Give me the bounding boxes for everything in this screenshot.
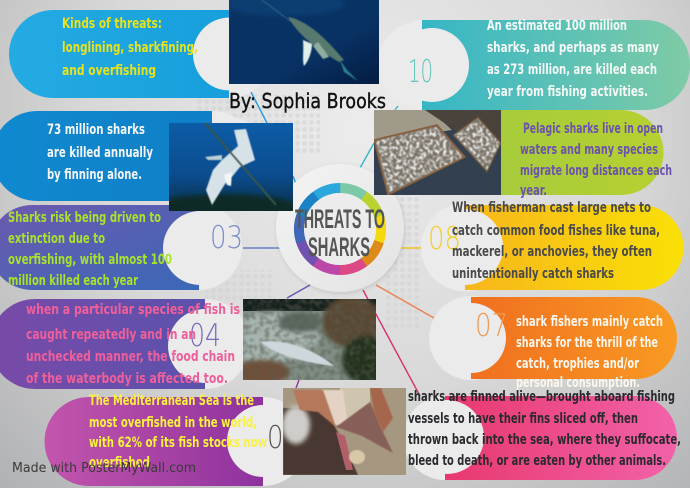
center title [295,204,385,262]
watermark: Made with PosterMyWall.com [12,461,196,476]
text: fishing activities [487,18,659,100]
text: extinction risk: million killed each year [8,273,138,289]
panel: finned alive [403,396,677,480]
text: food chain: when a particular species of fish is [26,302,240,318]
text: kinds of threats: and overfishing [62,63,156,79]
text: food chain: caught repeatedly and in an [26,327,196,343]
text: 73 million sharks: by finning alone. [47,167,142,183]
panel: kinds of threats [9,10,273,98]
photo: drying shark fins [374,110,501,195]
center title: SHARKS [308,232,370,262]
photo: shark on longline [225,0,379,84]
text: extinction risk: extinction due to [8,231,105,247]
text: 73 million sharks: 73 million sharks [47,122,145,138]
text: 73 million sharks: are killed annually [47,145,153,161]
text: Mediterranean Sea: with 62% of its fish stocks now [89,435,267,451]
text: Mediterranean Sea [89,393,267,471]
byline: By: Sophia Brooks [229,89,386,113]
number 03: 03 [210,220,243,256]
photo: dead shark on reef [243,299,376,380]
center title: THREATS TO [295,204,385,234]
panel: 73 million sharks [0,111,271,201]
text: extinction risk: Sharks risk being driven to [8,210,161,226]
number 07: 07 [475,308,508,344]
text: fishing activities: An estimated 100 million [487,18,627,34]
panel: large nets [421,204,684,292]
text: extinction risk [8,210,172,289]
text: Mediterranean Sea: The Mediterranean Sea is the [89,393,254,409]
text: shark fishers: catch, trophies and/or [516,356,639,372]
text: food chain: unchecked manner, the food chain [26,349,235,365]
text: Mediterranean Sea: most overfished in the world, [89,415,257,431]
text: Mediterranean Sea: overfished [89,455,150,471]
text: food chain: of the waterbody is affected too. [26,371,228,387]
photo: fin being cut [282,388,406,475]
text: 73 million sharks [47,122,153,183]
photo: hammerhead on line [169,123,293,211]
text: large nets: unintentionally catch sharks [452,266,614,282]
text: kinds of threats: Kinds of threats: [62,16,162,32]
text: kinds of threats: longlining, sharkfining, [62,40,198,56]
connector lines [243,92,434,396]
number 10: 10 [408,54,433,90]
panel: fishing activities [378,20,690,110]
number 08: 08 [428,221,461,257]
text: extinction risk: overfishing, with almost 100 [8,252,172,268]
number 04: 04 [189,318,221,354]
panel: extinction risk [0,204,242,290]
text: shark fishers [516,314,663,391]
number 05: 05 [267,420,300,456]
text: kinds of threats [62,16,198,79]
panel: food chain [0,299,250,389]
text: food chain [26,302,240,387]
panel: pelagic sharks [490,110,664,195]
panel: shark fishers [429,296,677,380]
text: pelagic sharks [520,121,672,199]
center badge [276,164,404,292]
text: pelagic sharks: year. [520,183,547,199]
text: finned alive [408,389,681,469]
panel: Mediterranean Sea [44,397,308,486]
text: large nets [452,200,660,282]
